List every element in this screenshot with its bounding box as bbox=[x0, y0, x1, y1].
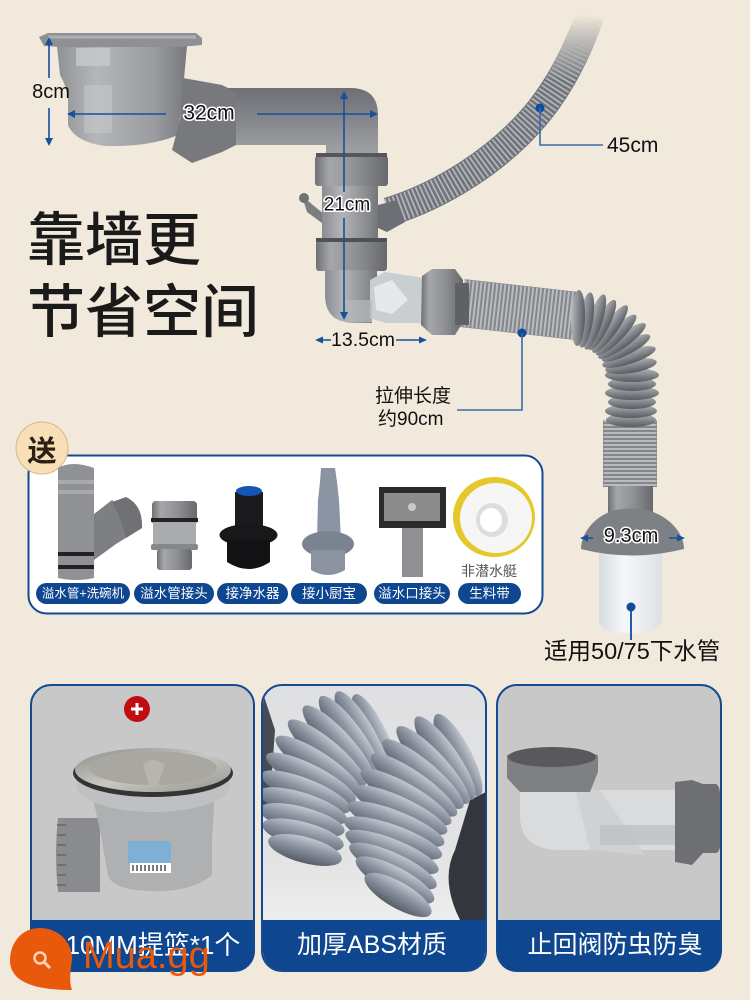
accessory labels: 溢水管+洗碗机 bbox=[42, 586, 125, 600]
icon: kitchen water heater connector bbox=[302, 468, 354, 575]
product: horizontal waste pipe and elbow bbox=[225, 88, 378, 160]
product: check-valve outlet nut bbox=[421, 269, 469, 335]
icon: water purifier connector bbox=[220, 486, 278, 569]
note: 非潜水艇: 非潜水艇 bbox=[461, 563, 517, 579]
product: white tail tube bbox=[599, 548, 662, 633]
dimension: 9.3cm bbox=[580, 525, 685, 547]
product: transparent check-valve elbow bbox=[325, 270, 424, 323]
panel: check valve bbox=[497, 685, 721, 971]
dimension: 32cm bbox=[67, 102, 378, 124]
product: stretchable main drain hose bbox=[462, 290, 659, 516]
image: strainer basket bbox=[56, 748, 233, 892]
callout: 45cm hose length bbox=[536, 104, 658, 157]
accessory labels: 接净水器 bbox=[226, 585, 280, 601]
caption: 10MM提篮*1个 bbox=[66, 930, 240, 960]
title: 靠墙更节省空间: 靠墙更 bbox=[27, 193, 201, 277]
dimension: 32cm: 32cm bbox=[183, 102, 235, 124]
accessory labels: 生料带 bbox=[469, 586, 510, 601]
accessory labels: 接小厨宝 bbox=[302, 585, 356, 601]
product: drain basin with flange bbox=[39, 33, 202, 146]
dimension: 13.5cm: 13.5cm bbox=[331, 329, 395, 351]
product: small corrugated overflow hose bbox=[388, 15, 590, 212]
dimension: 8cm bbox=[32, 37, 70, 146]
icon: overflow port connector bbox=[379, 487, 446, 577]
caption: 止回阀防虫防臭 bbox=[527, 931, 703, 959]
image: transparent check valve bbox=[507, 747, 720, 865]
dimension: 13.5cm bbox=[315, 329, 427, 351]
dimension: 9.3cm: 9.3cm bbox=[604, 525, 658, 547]
badge: 送: 送 bbox=[27, 428, 57, 470]
panel: free accessories bbox=[16, 422, 542, 614]
dimension: 21cm bbox=[324, 91, 370, 320]
accessory labels bbox=[36, 583, 521, 604]
callout: 45cm hose length: 45cm bbox=[607, 134, 658, 157]
callout: stretch length about 90cm: 约90cm bbox=[378, 408, 443, 430]
icon: PTFE tape roll bbox=[453, 477, 535, 557]
product: vertical T-body with collars bbox=[299, 153, 405, 271]
title: 靠墙更节省空间: 节省空间 bbox=[27, 265, 259, 349]
neck and flange bbox=[608, 486, 653, 516]
icon: T connector bbox=[58, 464, 142, 580]
callout: stretch length about 90cm: 拉伸长度 bbox=[375, 385, 451, 407]
caption: 加厚ABS材质 bbox=[297, 931, 447, 959]
bellows ribs on the bend bbox=[570, 290, 659, 427]
accessory labels: 溢水口接头 bbox=[378, 585, 446, 601]
callout: stretch length about 90cm bbox=[375, 328, 526, 430]
watermark: Mua.gg bbox=[10, 928, 210, 990]
product: floor flange bbox=[581, 508, 684, 556]
callout: fits 50/75 drain pipe: 适用50/75下水管 bbox=[544, 638, 720, 664]
dimension: 21cm: 21cm bbox=[324, 194, 370, 216]
product: horizontal coupling nut bbox=[172, 78, 236, 163]
icon: overflow pipe connector bbox=[151, 501, 198, 570]
panel: thick ABS material bbox=[255, 685, 491, 971]
watermark: Mua.gg: Mua.gg bbox=[83, 935, 210, 977]
panel: 110MM strainer basket bbox=[31, 685, 254, 971]
callout: fits 50/75 drain pipe bbox=[544, 602, 720, 664]
badge: 送 bbox=[16, 422, 68, 474]
dimension: 8cm: 8cm bbox=[32, 81, 70, 103]
image: corrugated hose close-up bbox=[263, 691, 485, 920]
title: 靠墙更节省空间 bbox=[27, 193, 259, 349]
accessory labels: 溢水管接头 bbox=[140, 585, 208, 601]
icon: plus badge bbox=[124, 696, 150, 722]
